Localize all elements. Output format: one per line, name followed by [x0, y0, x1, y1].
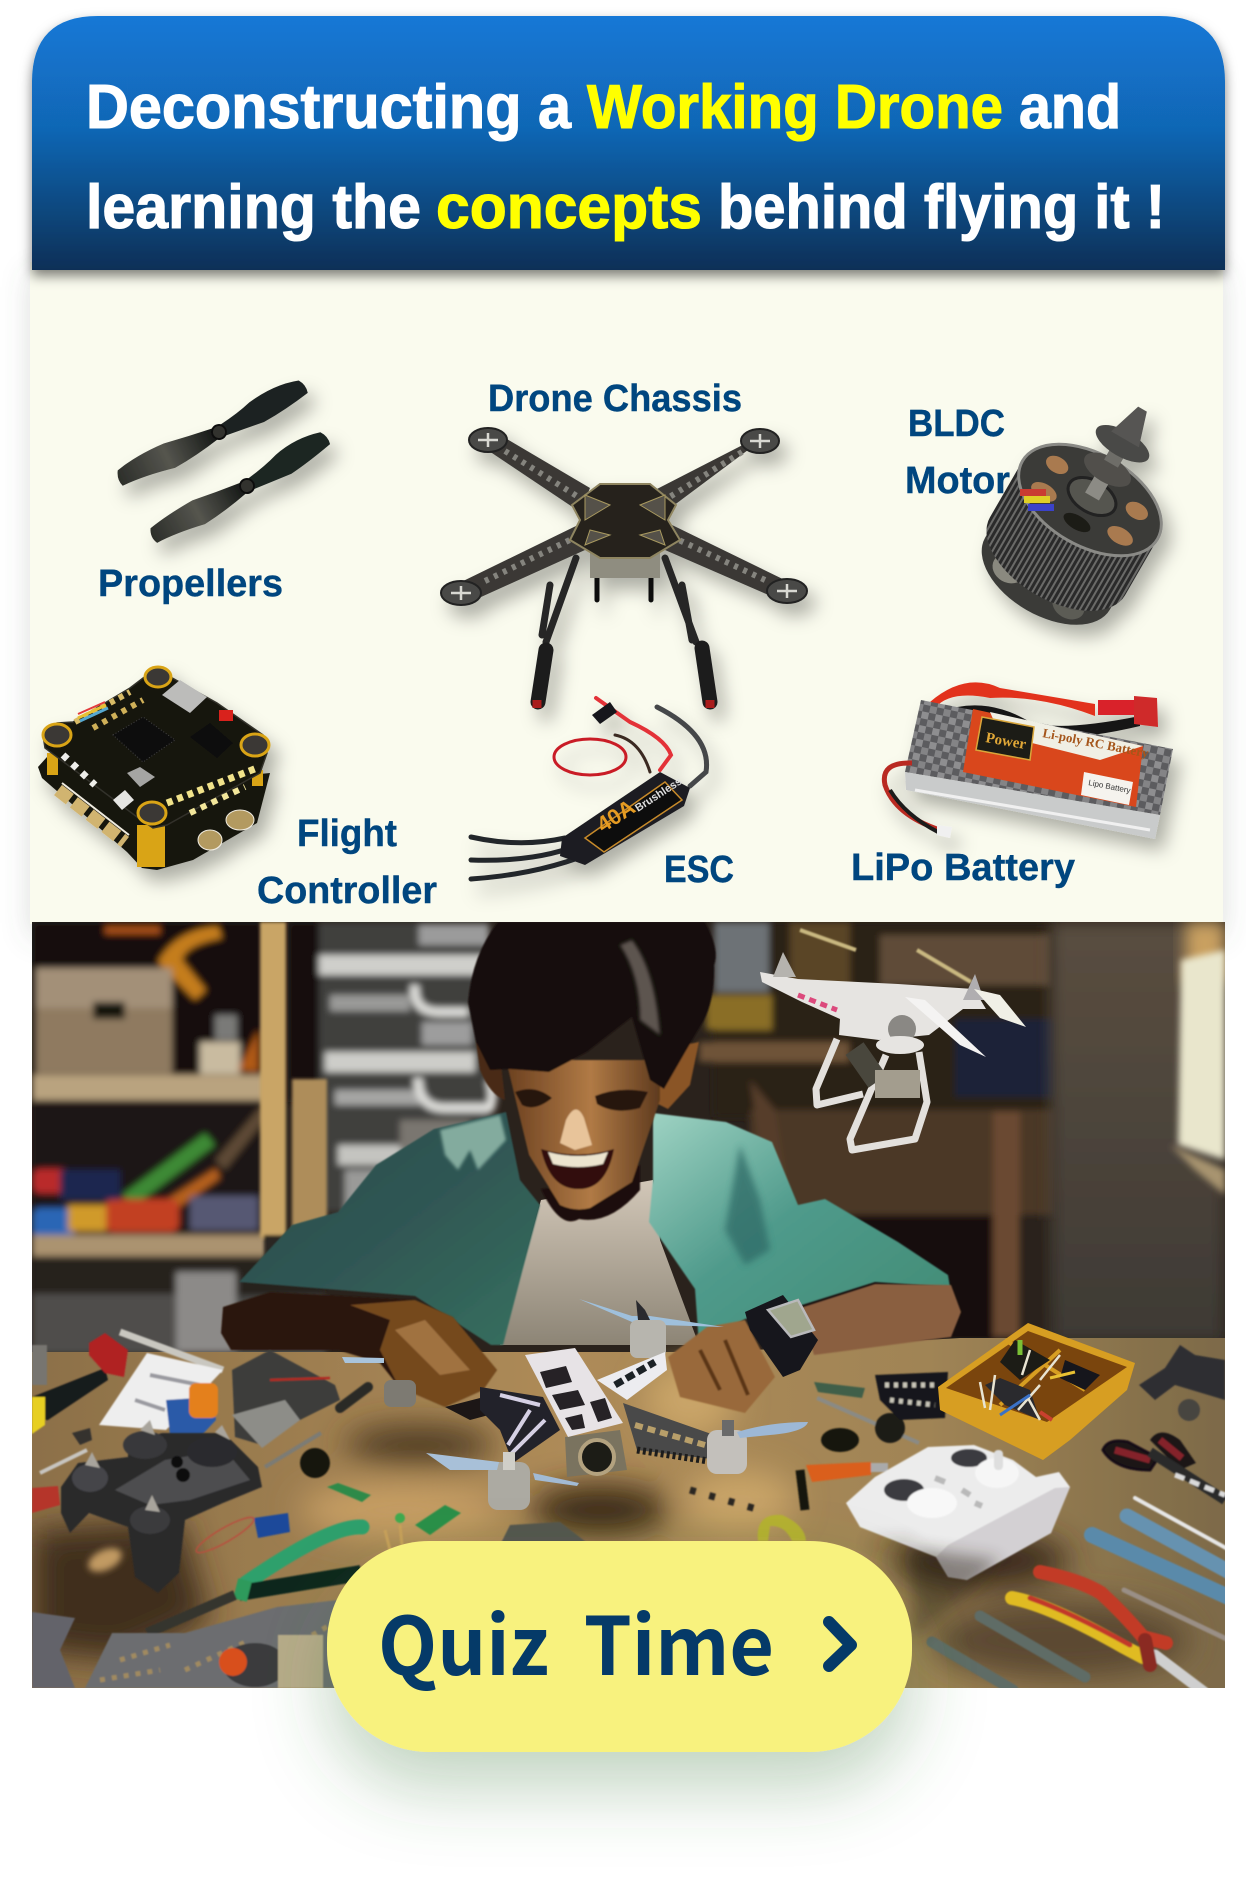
button: quiz time [327, 1541, 912, 1752]
title line 1 [86, 73, 1121, 142]
label: ESC: ESC [664, 849, 734, 891]
hair [468, 922, 716, 1089]
arms and hands [221, 1284, 961, 1413]
panel: cream parts background [30, 262, 1223, 924]
flying drone [760, 930, 1026, 1150]
watch [745, 1295, 818, 1377]
right bench tools [932, 1345, 1235, 1692]
label: propellers: Propellers [98, 563, 283, 605]
shirt left side [239, 1112, 540, 1345]
face and hair [468, 922, 716, 1221]
right workshop background [699, 922, 1055, 1340]
label: BLDC motor: Motor [905, 460, 1010, 502]
gamepad controller [61, 1420, 262, 1593]
title line 2 [86, 173, 1165, 242]
icon: LiPo battery [884, 682, 1173, 839]
panel: title banner [32, 16, 1225, 270]
table [32, 1338, 1225, 1688]
icon: drone chassis [441, 428, 807, 708]
label: BLDC motor: BLDC [908, 403, 1005, 445]
yellow parts box [938, 1323, 1135, 1460]
label: BLDC motor [905, 403, 1010, 502]
t-shirt [500, 1180, 699, 1345]
button label: Quiz Time [378, 1583, 774, 1699]
label: drone chassis: Drone Chassis [488, 378, 742, 420]
icon: ESC [471, 698, 707, 879]
white remote controller [846, 1445, 1070, 1580]
workbench drone under construction [342, 1299, 808, 1510]
label: flight controller: Controller [257, 870, 437, 912]
icon: BLDC motor [959, 370, 1210, 649]
icon: LiPo battery: Li-poly RC Battery [1041, 725, 1150, 761]
title line 1: Deconstructing a [86, 73, 571, 142]
icon: chevron arrow [829, 1622, 851, 1666]
right bench small parts [690, 1372, 948, 1541]
posts [260, 922, 327, 1265]
title line 2: concepts [436, 173, 702, 242]
green pliers [147, 1527, 362, 1633]
icon: LiPo battery: Lipo Battery [1088, 778, 1131, 795]
icon: ESC: 40A [592, 794, 640, 837]
title line 2: behind flying it ! [718, 173, 1165, 242]
label: flight controller [257, 813, 437, 912]
shirt right side [649, 1113, 950, 1345]
left bench tools [32, 1332, 590, 1558]
photo: boy building a drone at a workbench [32, 922, 1235, 1692]
icon: LiPo battery: Power [984, 730, 1028, 753]
icon: flight controller [38, 667, 270, 870]
boy [221, 922, 961, 1413]
icon: propellers [111, 376, 336, 549]
icon: ESC: Brushless [633, 775, 684, 815]
drawers background [288, 922, 492, 1220]
title line 1: Working Drone [587, 73, 1003, 142]
gray lace parts [32, 1600, 338, 1688]
label: flight controller: Flight [297, 813, 397, 855]
title line 1: and [1019, 73, 1121, 142]
label: LiPo battery: LiPo Battery [851, 847, 1075, 889]
title line 2: learning the [86, 173, 421, 242]
left shelves background [32, 922, 326, 1356]
